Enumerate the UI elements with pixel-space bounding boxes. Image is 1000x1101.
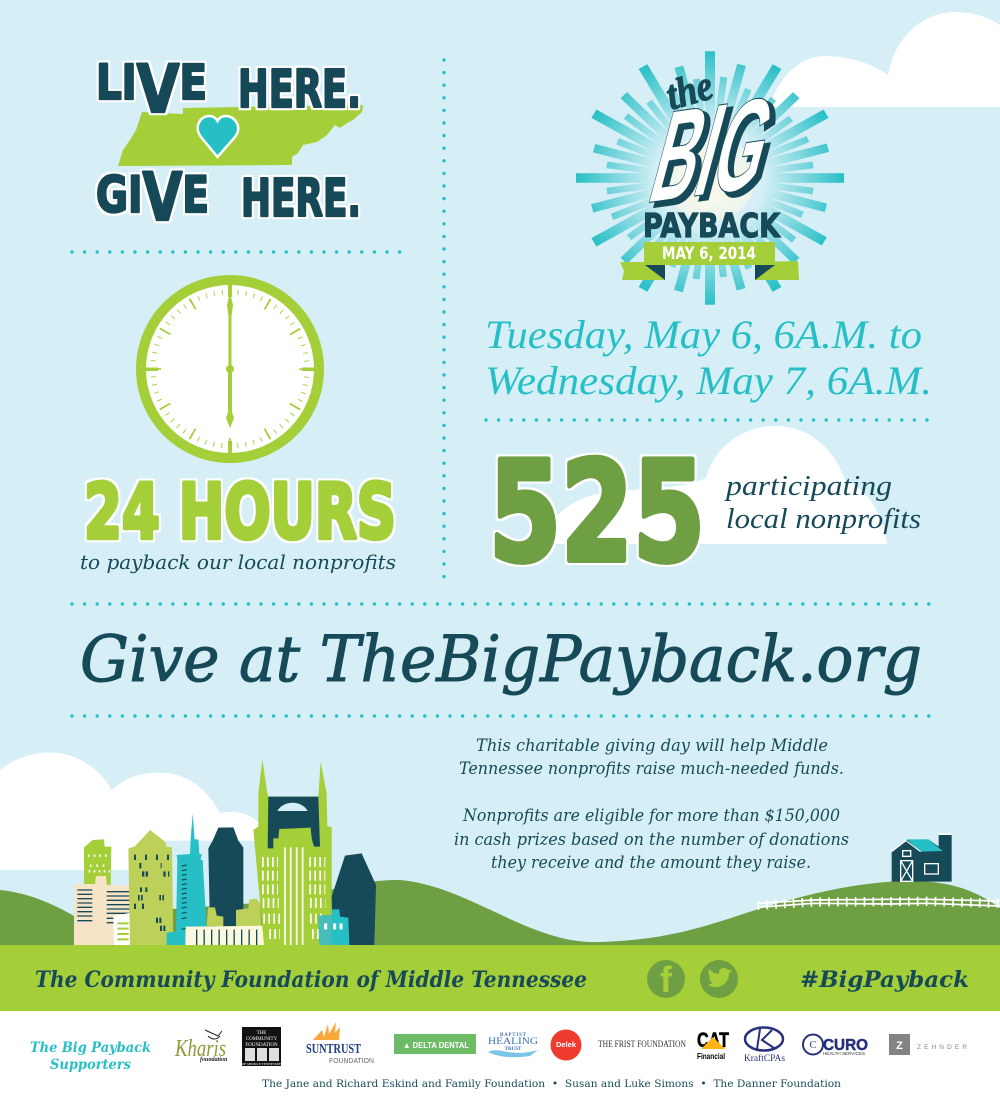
building: green small	[84, 839, 111, 885]
text: participating local nonprofits	[724, 471, 921, 535]
footer band	[0, 945, 1000, 1011]
logo: kraft cpas	[744, 1028, 785, 1064]
supporters strip	[0, 1011, 1000, 1101]
clock hands	[227, 293, 233, 369]
logo: delek: Delek	[556, 1040, 577, 1049]
text: community foundation: The Community Foundation of Middle Tennessee	[35, 967, 587, 993]
building: dark tower	[208, 827, 243, 927]
cloud: top right	[770, 12, 1000, 107]
logo: suntrust: SUNTRUST	[306, 1042, 361, 1057]
number: 525: 525	[489, 432, 705, 593]
BIG: BIG	[642, 72, 793, 235]
heading: give here: GI	[96, 166, 156, 224]
building: olive tower	[128, 830, 173, 945]
logo: curo	[803, 1034, 868, 1056]
building: cream low	[185, 926, 268, 945]
building: cream	[74, 876, 131, 945]
building: batman tower	[253, 759, 332, 945]
logo: baptist healing trust: HEALING	[488, 1037, 538, 1047]
dotted dividers	[72, 60, 930, 716]
BIG: BIG	[637, 68, 788, 231]
logo: cat financial	[697, 1029, 729, 1061]
tennessee state shape	[118, 105, 363, 166]
icon: heart	[198, 116, 238, 157]
logo: curo: C	[810, 1040, 817, 1051]
building: teal spire	[167, 813, 206, 945]
logo: cat financial: Financial	[697, 1051, 725, 1061]
logo: baptist healing trust: TRUST	[505, 1047, 522, 1052]
logo: suntrust	[306, 1022, 374, 1065]
logo: curo: CURO	[823, 1037, 868, 1054]
text: event dates: Tuesday, May 6, 6A.M. to	[485, 312, 922, 357]
heading: live here: LI	[96, 55, 144, 111]
heading: give here	[96, 159, 361, 236]
BIG	[637, 68, 793, 235]
logo: delek	[550, 1030, 582, 1060]
text: description	[454, 736, 849, 872]
heading: give here: V	[143, 159, 182, 236]
heading: live here	[96, 51, 361, 128]
logo: kharis: Kharis	[174, 1036, 226, 1062]
heading: give here: E	[182, 166, 209, 224]
text: description: they receive and the amount they raise.	[491, 853, 811, 872]
heading: give at thebigpayback.org: Give at TheBigPayback.org	[80, 623, 922, 697]
logo: kharis: foundation	[200, 1057, 228, 1063]
logo: curo: HEALTH SERVICES	[823, 1051, 865, 1056]
icon: facebook	[647, 959, 685, 1000]
building: white	[113, 911, 139, 945]
logo: cat financial: CAT	[697, 1029, 729, 1052]
logo: zehnder: Z	[896, 1040, 903, 1052]
cloud: behind 525	[540, 426, 887, 544]
barn	[892, 834, 952, 882]
hour ticks	[155, 294, 305, 444]
building: small olive	[207, 907, 223, 927]
logo: baptist healing trust	[488, 1033, 538, 1057]
icon: facebook: f	[660, 959, 673, 1000]
logo: delta dental	[394, 1034, 476, 1054]
logo: zehnder: ZEHNDER	[917, 1044, 967, 1051]
logo: live here give here	[96, 51, 363, 236]
text: event dates: Wednesday, May 7, 6A.M.	[485, 358, 932, 403]
heading: supporters: Supporters	[50, 1057, 131, 1073]
ribbon date: MAY 6, 2014	[662, 244, 756, 264]
heading: live here: HERE.	[238, 60, 361, 120]
logo: community foundation: THE	[257, 1031, 266, 1036]
logo: community foundation: OF MIDDLE TENNESSEE	[242, 1062, 281, 1066]
icon: barn and fence	[757, 833, 1000, 907]
text: description: Nonprofits are eligible for more than $150,000	[462, 806, 840, 825]
text: description: in cash prizes based on the number of donations	[454, 830, 849, 849]
logo: kraft cpas: KraftCPAs	[744, 1053, 785, 1064]
the: the	[661, 63, 718, 120]
minute ticks	[153, 292, 307, 446]
text: hashtag: #BigPayback	[800, 967, 969, 993]
text: participating local nonprofits: local nonprofits	[726, 504, 921, 535]
logo: the big payback	[576, 51, 844, 305]
heading: 24 hours: 24 HOURS	[84, 467, 396, 556]
building: dark right	[332, 853, 376, 945]
logo: community foundation	[242, 1027, 281, 1066]
text: description: This charitable giving day will help Middle	[476, 736, 828, 755]
hills	[0, 880, 1000, 946]
text: event dates	[485, 312, 932, 403]
heading: supporters	[30, 1040, 151, 1073]
PAYBACK: PAYBACK	[643, 206, 781, 245]
sunburst	[576, 51, 844, 305]
logo: frist foundation: THE FRIST FOUNDATION	[598, 1040, 686, 1050]
logo: baptist healing trust: BAPTIST	[500, 1033, 527, 1038]
logo: community foundation: COMMUNITY	[246, 1037, 278, 1042]
heading: live here: V	[137, 51, 179, 128]
heading: live here: E	[179, 55, 207, 111]
logo: suntrust: FOUNDATION	[329, 1056, 374, 1065]
heading: supporters: The Big Payback	[30, 1040, 151, 1056]
skyline	[74, 759, 376, 945]
logo: kharis	[174, 1030, 228, 1063]
logo: zehnder	[889, 1034, 967, 1055]
clock	[136, 275, 324, 463]
icon: twitter	[700, 960, 738, 998]
building: small teal	[318, 909, 349, 945]
text: additional supporters: The Jane and Richard Eskind and Family Foundation • Susan and Luke Simons • The Danner Foundation	[262, 1079, 842, 1090]
ribbon	[620, 262, 665, 280]
logo: delta dental: ▲ DELTA DENTAL	[403, 1040, 469, 1050]
text: to payback our local nonprofits: to payback our local nonprofits	[80, 550, 396, 574]
text: description: Tennessee nonprofits raise much-needed funds.	[459, 759, 844, 778]
fence	[757, 899, 1000, 907]
logo: community foundation: FOUNDATION	[245, 1043, 278, 1048]
heading: give here: HERE.	[241, 169, 361, 229]
text: participating local nonprofits: participating	[724, 471, 892, 502]
lower left cloud	[0, 752, 260, 870]
